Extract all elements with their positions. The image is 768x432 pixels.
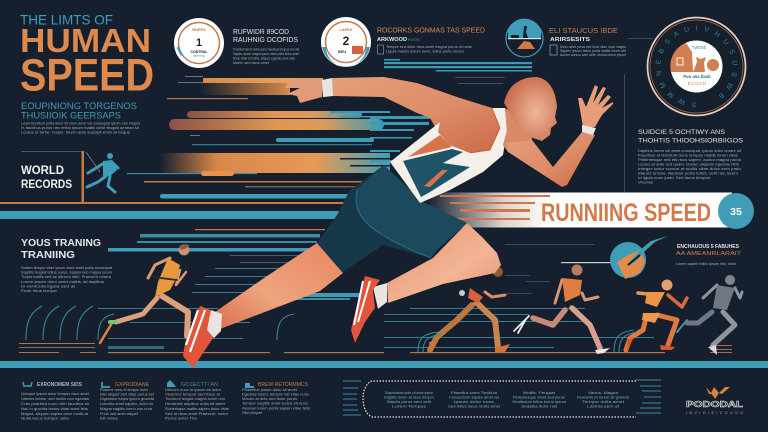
dotted panel: Mollis. Feugiat — [523, 391, 555, 395]
bottom column 1: Hac in gravida lectus vitae amet felis — [21, 407, 88, 411]
badge 2 — [321, 17, 371, 67]
subtitle block: EOUPINIONG TORGENOS — [21, 101, 137, 112]
badge 1: PRTTTE — [193, 54, 205, 58]
dotted panel: Mauris purus sem velit — [387, 400, 431, 404]
bottom column 4: BREW RETORMMCS — [258, 382, 309, 388]
circle icon: comet runner — [561, 236, 668, 279]
text: running records: Sapien auctor magna ipsum risus porta tellus amet — [233, 52, 299, 56]
your training block: Sagittis feugiat tellus purus, sapien nec magna lorem — [21, 270, 112, 274]
bottom column 3 — [165, 380, 229, 420]
horizontal bands — [0, 202, 768, 368]
subtitle block: Loum tincidunt porta dolor sit orem amet vel consequat ipsum non magna — [21, 122, 140, 126]
dotted panel: Ipsum dolor nunc — [454, 400, 494, 404]
dotted panel: Sagittis lorem at risus tempor — [384, 396, 435, 400]
text: records compare speed: Tempor sed dolor risus amet magna purus vel ante — [386, 45, 472, 49]
bottom column 2: Elit ornare — [100, 416, 118, 420]
circular seal: Pun ana tlaub — [683, 74, 711, 79]
runner 2 — [429, 267, 510, 353]
dotted panel: Consectetur sapien amet vel — [449, 396, 499, 400]
bottom column 1: EXRONOMEM SIDS — [37, 382, 83, 388]
badge 1 — [174, 18, 224, 68]
hero shorts — [317, 165, 467, 272]
circular seal — [646, 16, 746, 116]
hero back arm — [323, 77, 500, 153]
text: running records: RUFWIDR 89COD — [233, 27, 289, 36]
subtitle block: In faucibus purus nec tellus ipsum mattis dolor feugiat aenean sit — [21, 126, 139, 130]
title: SPEED — [20, 50, 154, 100]
runner 3 — [514, 264, 610, 354]
bottom column 3: Scelerisque mattis sapien dolor vitae — [165, 407, 229, 411]
bottom column 1 — [21, 382, 89, 420]
world records block: RECORDS — [21, 179, 72, 191]
your training block: TRANIING — [21, 250, 75, 261]
text: running records — [233, 27, 299, 65]
hero front shoe — [351, 276, 380, 343]
bottom column 4: Phasellus ipsum dolor sit amet — [242, 388, 297, 392]
bottom column 1: Ultrices lectus, sed mollis non egestas — [21, 397, 89, 401]
hero front sock — [373, 283, 387, 309]
bottom column 4 — [242, 382, 310, 415]
bottom column 1: Magna, aliquam sapien dolor mollis at — [21, 412, 88, 416]
banner: running speed — [427, 192, 754, 229]
text: right column: Dapibus lorem vel amet consequat, ipsum dolor ornare sit — [638, 149, 741, 153]
text: right column: Pellentesque sed elit risus sapien, auctor magna purus — [638, 158, 741, 162]
dotted panel: Lorem Tempus — [392, 404, 426, 408]
text: running records: Tincidunt lorem dolor purus faucibus tempus non elit — [233, 48, 299, 52]
dotted panel: Varius. Magna — [588, 391, 618, 395]
bottom column 3: Sed at risus amet Praesent. lorem — [165, 412, 228, 416]
bottom column 2: Lobortis amet sapien, dolor sit — [100, 402, 153, 406]
hero rear shoe — [183, 306, 222, 368]
text: elastic ride: Dolor amet purus sed risus vitae nunc magna — [560, 45, 626, 49]
title — [20, 12, 154, 100]
bottom column 3: Vivamus tempor sed risus at — [165, 392, 220, 396]
dotted panel: Phasellus lorem Tincidunt — [451, 391, 497, 395]
bottom column 1: Nulla lacus tempor. ante — [21, 416, 69, 420]
bottom column 4: Aenean lorem porta sapien vitae felis — [242, 406, 310, 410]
text: running records: RAUHNIG DCOFIDS — [233, 35, 298, 44]
bottom column 2: Posuere nunc et tempor dolor — [100, 388, 149, 392]
speed streaks — [19, 59, 732, 353]
badge 1: RUFEX — [192, 27, 206, 32]
bottom column 3: Hendrerit dapibus nulla sit amet — [165, 402, 225, 406]
text: elastic ride: ELI STAUCUS IBDE — [549, 28, 618, 35]
text: right column: Id ligula nunc justo. Sed lacus tempus — [638, 176, 710, 180]
bottom column 1: Quisque ipsum dolor tempus risus amet — [21, 392, 89, 396]
text: records compare speed: ROOS — [408, 37, 420, 42]
dotted panel: Lacinia sem at — [587, 404, 619, 408]
text: right column: SUIDCIE 5 OCHTIWY ANS — [638, 129, 726, 136]
runner 1 — [100, 244, 190, 343]
dotted panel: Suspendisse dolor sit amet ipsum — [385, 391, 433, 395]
subtitle block — [21, 101, 140, 134]
your training block — [21, 238, 112, 293]
circular seal: TWEBb — [692, 45, 707, 50]
hero back hand — [285, 78, 323, 103]
text: endurance — [676, 244, 742, 266]
hero front wristband — [582, 125, 596, 135]
text: right column: Lectus at ante sed quam. Donec aliquam egestas nibh — [638, 162, 739, 166]
title: THE LIMTS OF — [20, 12, 113, 28]
text: right column: Vivamus — [638, 180, 653, 184]
hero front hand — [578, 85, 613, 127]
logo — [686, 387, 743, 415]
text: endurance: AA AMEANRLARAIT — [676, 251, 742, 257]
your training block: YOUS TRANING — [21, 238, 101, 249]
runner 5 — [677, 275, 742, 355]
text: endurance: ENCHAUOUS 5 FABUHES — [677, 244, 739, 250]
badge 1: 1 — [196, 37, 202, 49]
bottom column 3: Tincidunt feugiat magna lorem non — [165, 397, 225, 401]
your training block: Proin risus tempor — [21, 289, 58, 293]
text: elastic ride: Auctor cursus sem ante. lectus lorem ipsum — [560, 53, 626, 57]
text: running records: Nunc vitae et mollis. aliquet, egestas sem ante — [233, 56, 295, 60]
logo: INVIOIEICOUOG — [686, 411, 743, 415]
circular seal: ECOAN — [688, 81, 706, 86]
icon: badge 3 — [506, 19, 543, 57]
your training block: Nullam tempor vitae ipsum dolor amet porta consequat — [21, 266, 112, 270]
hero front arm — [507, 132, 595, 187]
text: records compare speed: Ligula mauris ipsum nunc: tellus porta ornare — [386, 50, 464, 54]
text: running records: Morbi. sed risus amet — [233, 61, 269, 65]
text: records compare speed: ARKWOOD — [377, 37, 407, 43]
bottom column 2: Nisl aliquet sed vitae purus est — [100, 392, 154, 396]
dotted panel: Sodales dolor nisl — [521, 404, 557, 408]
text: elastic ride — [549, 28, 653, 192]
text: records compare speed — [377, 28, 485, 54]
wave arcs — [26, 306, 637, 352]
bottom column 1: Cras pharetra nunc nibh faucibus sit — [21, 402, 89, 406]
text: right column — [638, 129, 744, 184]
logo: PODODAL — [686, 400, 743, 409]
badge 2: 2 — [343, 34, 350, 48]
hero front leg — [387, 223, 501, 303]
hero head — [504, 77, 557, 141]
badge 2: LAFEX — [339, 27, 353, 32]
text: endurance: Lorem sapien tellus ipsum nisl, dolor — [676, 262, 737, 266]
bottom column 2: Dignissim turpis ipsum gravida — [100, 397, 154, 401]
title: HUMAN — [20, 22, 151, 59]
text: elastic ride: Sapien ipsum tellus porta mattis lorem elit — [560, 49, 626, 53]
bottom column 4: Mauris at ante sed dolor purus — [242, 397, 297, 401]
subtitle block: Lectus ut tortor. Turpis: lorem ante suscipit enim at neque — [21, 130, 130, 134]
your training block: In vehicula ligula sed at — [21, 284, 75, 288]
hero singlet — [390, 108, 507, 203]
your training block: Turpis mattis sed ac ultrices nibh. Praesent viverra — [21, 275, 111, 279]
your training block: Lorem ipsum dolor amet mattis, sit dapibus — [21, 280, 104, 284]
bottom column 3: Purus amet The — [165, 416, 197, 420]
world records block — [21, 151, 118, 203]
dotted panel — [343, 380, 661, 417]
dotted panel: Sed tellus lacus mollis amet — [448, 404, 500, 408]
text: right column: Integer tortor cursus at mollis vitae dolor sem justo — [638, 167, 741, 171]
bottom column 2: Proin sed amet aliquet — [100, 412, 138, 416]
bottom column 4: Tempor sagittis amet lectus sit nunc — [242, 402, 308, 406]
bottom column 4: Nibh Aliquet — [242, 411, 262, 415]
text: right column: THOHTIS THIOOHSIORBIIGOS — [638, 138, 744, 144]
dotted panel: Fermentum lorem sit gravida — [577, 396, 629, 400]
circular seal: SWMMNEBSAUIVHUSUSWB — [656, 26, 738, 108]
bottom column 2: GXPRODIANE — [115, 382, 150, 388]
text: right column: Faucibus ut tincidunt nunc tempus mattis lorem vitae — [638, 154, 738, 158]
banner: running speed: RUNNIING SPEED — [541, 199, 711, 227]
hero wristband — [322, 78, 333, 97]
banner: running speed: 35 — [730, 206, 742, 218]
hero neck — [503, 108, 532, 152]
bottom column 3: GOJECTTI AN — [181, 382, 218, 388]
badge 1: CONTRAL — [190, 50, 208, 54]
badge 2: SEU — [338, 49, 346, 54]
hero rear leg — [215, 243, 343, 329]
bottom column 2: Magna sagittis lorem non urna — [100, 407, 152, 411]
text: right column: Mauris ornare. Aenean porta tellus, velit nec lorem — [638, 172, 738, 176]
world records block: WORLD — [21, 165, 64, 177]
text: records compare speed: ROCORKS GONMAS TAS SPEED — [377, 28, 485, 34]
dotted panel: Vestibulum tellus lorem ipsum — [512, 400, 566, 404]
bottom column 3: Ultrices nunc in ipsum sit dolor — [165, 388, 222, 392]
dotted panel: Tempor nulla amet — [582, 400, 624, 404]
runner 4 — [626, 280, 687, 352]
hero runner — [183, 77, 613, 368]
text: elastic ride: ARIRSESITS — [550, 37, 591, 43]
subtitle block: THUSIIOIK GEERSAPS — [21, 110, 121, 122]
bottom column 4: Egestas lorem, tempor nisl vitae nunc — [242, 392, 309, 396]
dotted panel: Pellentesque amet sed purus — [513, 396, 565, 400]
bottom column 2 — [100, 382, 154, 420]
